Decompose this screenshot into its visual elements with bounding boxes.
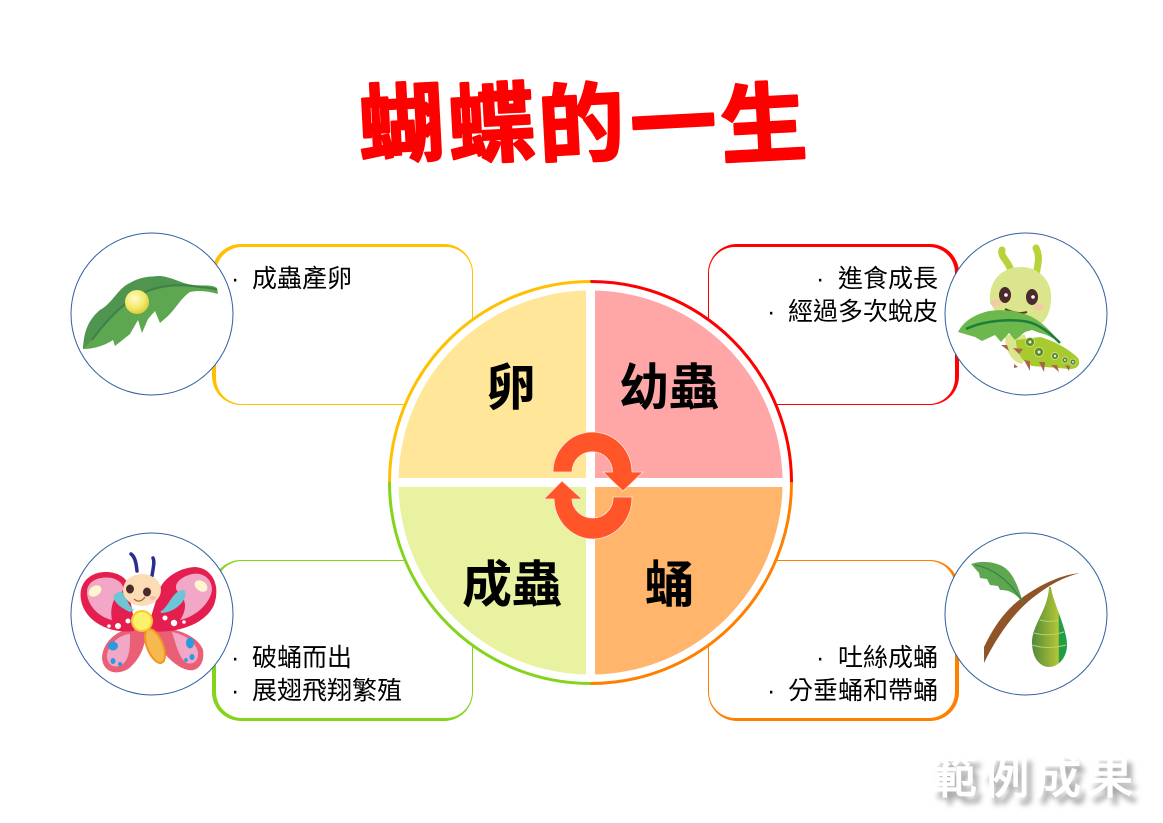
outer arc: pupa <box>590 482 792 684</box>
quadrant: adult <box>398 487 586 674</box>
text: egg notes: 成蟲產卵 <box>252 265 352 293</box>
icon: caterpillar <box>945 233 1107 395</box>
leaf <box>971 562 1023 603</box>
egg <box>125 290 149 314</box>
text: pupa notes: 吐絲成蛹 <box>838 644 938 672</box>
label: adult: 成蟲 <box>462 557 562 613</box>
upper wings <box>81 572 134 631</box>
quadrant: egg <box>398 290 586 478</box>
text: egg notes: · <box>231 265 239 293</box>
central cycle diagram <box>388 280 792 684</box>
watermark: 範例成果 <box>931 751 1133 803</box>
text: pupa notes: 分垂蛹和帶蛹 <box>788 677 938 705</box>
text: pupa notes <box>767 644 938 705</box>
quadrant: pupa <box>595 487 782 674</box>
abdomen <box>141 626 169 666</box>
antennae <box>131 554 154 576</box>
watermark: 範例成果 <box>936 758 1138 810</box>
outer arc: egg <box>390 282 590 482</box>
text: larva notes: · <box>767 298 775 326</box>
text: adult notes: 展翅飛翔繁殖 <box>252 677 402 705</box>
head <box>123 574 161 606</box>
text: larva notes: 經過多次蛻皮 <box>788 298 938 326</box>
icon: leaf with egg <box>71 233 233 395</box>
branch <box>984 573 1080 663</box>
outer arc: adult <box>389 482 590 684</box>
icon: chrysalis <box>945 533 1107 695</box>
text: adult notes <box>231 644 402 705</box>
outer arc: larva <box>590 282 792 482</box>
icon: butterfly <box>71 533 233 695</box>
text: pupa notes: · <box>767 677 775 705</box>
text: larva notes <box>767 265 938 326</box>
text: larva notes: · <box>816 265 824 293</box>
text: pupa notes: · <box>816 644 824 672</box>
label: egg: 卵 <box>486 360 536 416</box>
icon: cycle arrows <box>544 432 643 539</box>
panel: adult info box <box>212 560 473 721</box>
text: adult notes: · <box>231 677 239 705</box>
label: pupa: 蛹 <box>644 557 694 613</box>
panel: larva info box <box>708 244 959 405</box>
text: larva notes: 進食成長 <box>838 265 938 293</box>
label: larva: 幼蟲 <box>619 360 719 416</box>
pupa <box>1032 587 1067 667</box>
thorax <box>132 611 152 631</box>
panel: pupa info box <box>708 560 959 721</box>
text: adult notes: 破蛹而出 <box>252 644 352 672</box>
quadrant: larva <box>595 290 782 478</box>
text: adult notes: · <box>231 644 239 672</box>
title: 蝴蝶的一生 <box>356 76 809 176</box>
lower wings <box>102 628 146 672</box>
panel: egg info box <box>212 244 473 405</box>
